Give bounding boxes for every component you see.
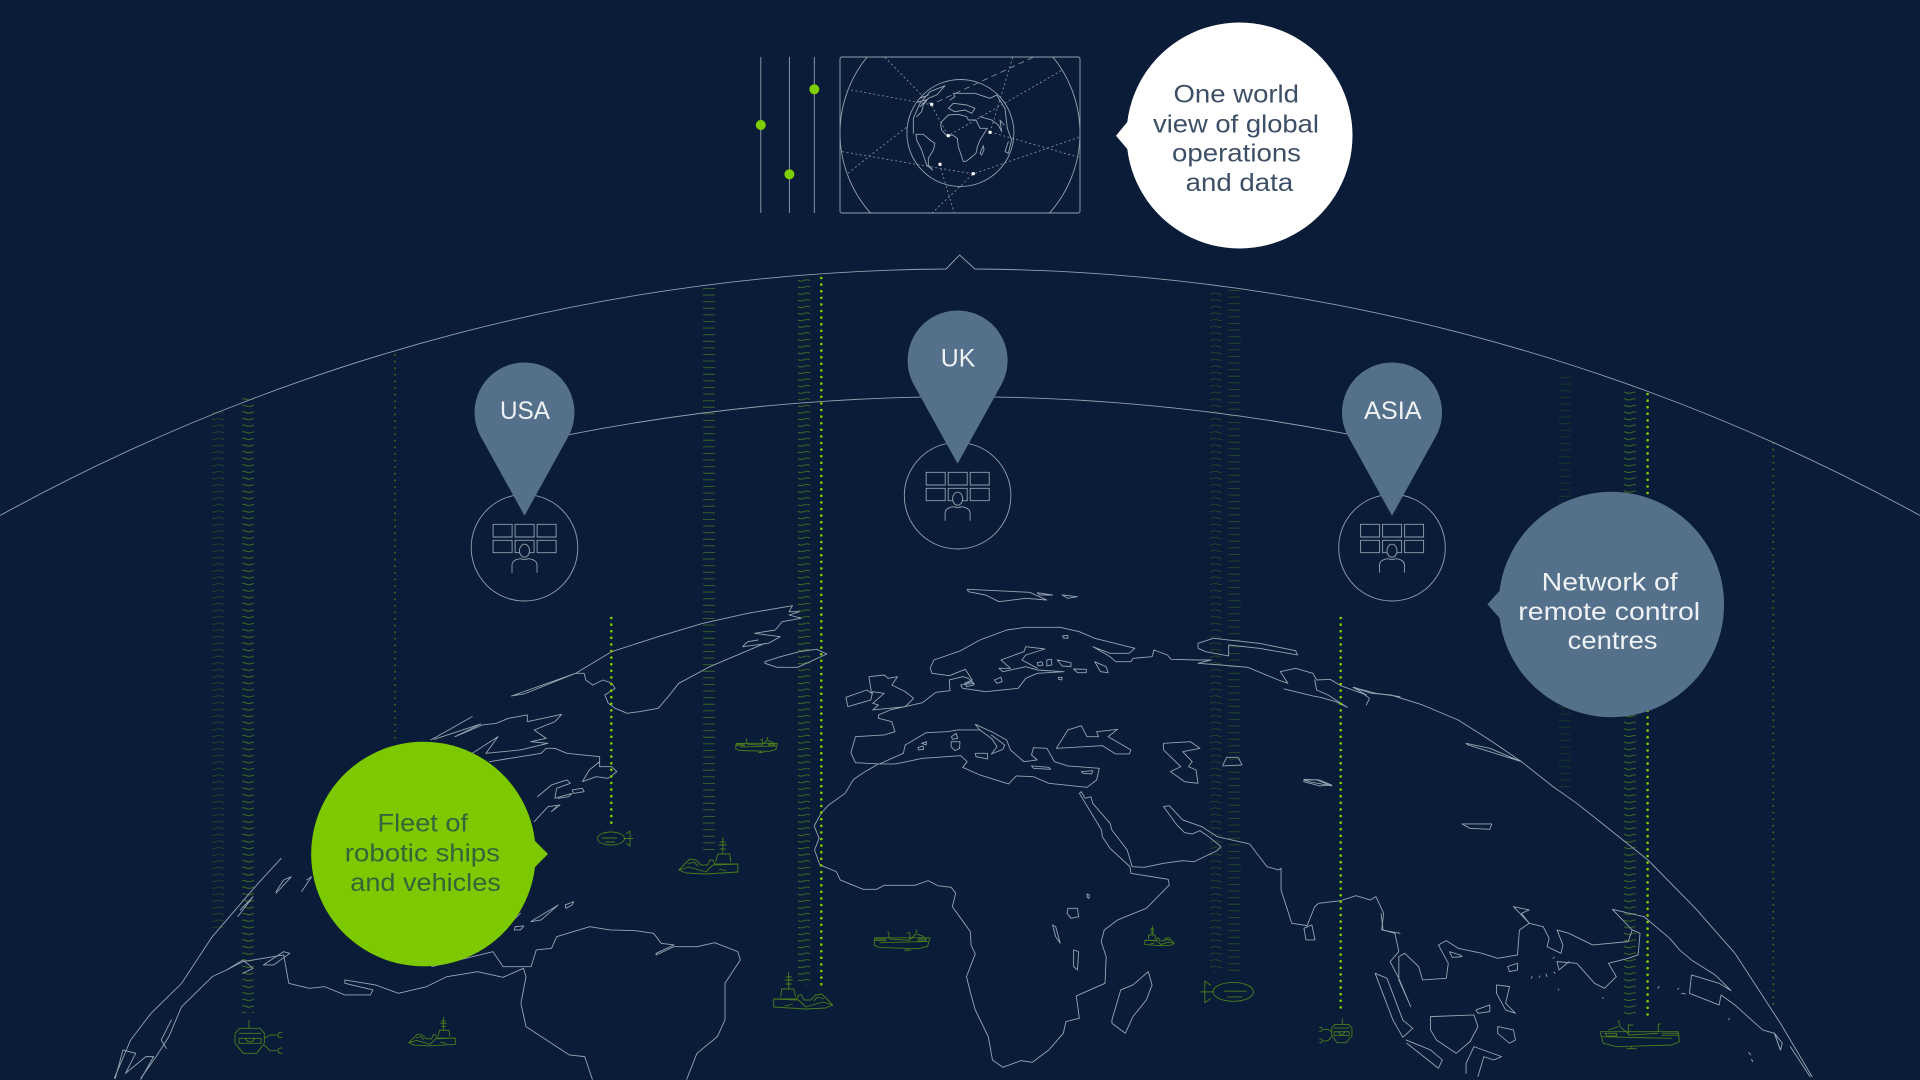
Svalbard [967,589,1077,602]
callout text: robotic ships [345,840,500,868]
Caribbean [514,902,574,930]
dashed column 1565 [1559,377,1571,790]
Java [1406,1040,1442,1068]
callout text: One world [1174,81,1299,109]
Siberian peninsula [1284,680,1347,707]
tanker mid [736,737,778,752]
wavy signal column 1 [212,410,224,928]
mini globe [907,80,1014,186]
dim dotted line left [394,355,396,741]
Baltic islands [965,635,1108,687]
callout: one world view [1116,23,1352,248]
slate bubble [1487,492,1724,717]
Bay islands [227,952,290,973]
Sumatra [1375,973,1413,1037]
pin label USA: USA [500,397,550,425]
Caspian [1164,742,1200,783]
dotted link 611 [610,618,613,825]
connection lines [842,57,1079,213]
wavy signal column 1216 [1210,290,1222,973]
dim dotted line right [1772,443,1774,1007]
Iceland [765,649,827,667]
slider dot 2 [784,169,794,179]
wavy signal column 804 [798,279,810,986]
operator icon [926,472,989,521]
bright dotted links [611,278,1648,1015]
Earth limb west [114,858,312,1078]
callout: fleet of robotic ships and vehicles [311,742,548,966]
Mediterranean south coast [851,647,1099,787]
South Asia coast [1381,907,1780,1050]
map: Americas and Greenland [431,606,827,930]
tug ship mid [679,837,738,874]
Greenland [511,606,801,713]
Pacific arc [1774,1033,1810,1077]
South America north and east [432,927,740,1079]
green bubble [311,742,548,966]
Kamchatka [1466,743,1521,762]
callout text [345,810,501,897]
callout text: Network of [1542,568,1678,596]
Sulawesi [1466,1047,1502,1077]
inner network arc [569,397,1351,435]
Indian Ocean islands [1053,894,1089,970]
operator icon [1361,524,1424,573]
Coast [534,805,560,822]
data sliders [756,57,819,213]
callout text [1518,568,1700,655]
submarine Indian Ocean [1200,981,1254,1003]
Earth limb east [1353,687,1812,1077]
tug Indian Ocean [1145,926,1174,946]
Korea and Japan [1557,930,1640,988]
pin ASIA [1342,362,1442,516]
Scandinavia south [965,669,972,683]
pin USA [474,362,574,516]
ROV left [235,1020,282,1053]
big ship right [1600,1020,1679,1049]
monitor with globe [840,56,1080,214]
dashed column 1234 [1228,290,1240,973]
callout text: and data [1186,169,1293,197]
Italy [980,730,1005,754]
Aral [1223,757,1242,766]
Canada east [489,748,617,782]
wavy signal column 2 [242,398,254,1013]
Balkhash [1304,780,1332,786]
control centre USA [471,362,578,601]
tanker Atlantic [874,929,930,950]
UK and Ireland [846,675,914,710]
callout text: view of global [1153,110,1319,138]
dotted link 821 [820,278,823,985]
Gulf islands [538,780,584,798]
outer arc with apex notch [0,255,1920,516]
Novaya Zemlya [1198,638,1298,656]
tug flipped centre [774,972,833,1009]
slider tracks [761,57,814,213]
slider dot 1 [756,120,766,130]
submarine mid [598,831,633,846]
callout text: Fleet of [378,810,468,838]
operator circle [904,442,1011,549]
callout text: and vehicles [350,869,501,897]
node dots [930,103,992,175]
operator circle [471,494,578,601]
operator icon [493,524,556,573]
signal columns [212,279,1773,1015]
vehicle fleet [235,737,1679,1053]
control centre UK [904,310,1011,549]
pin UK [908,310,1008,464]
Africa and Arabia coast [814,764,1400,1067]
Sri Lanka [1304,925,1315,940]
map: Central and South America [114,858,740,1079]
Scandinavia and Russia coast [930,627,1400,697]
pin label ASIA: ASIA [1364,397,1422,425]
monitor frame [840,57,1080,213]
Black Sea [1056,726,1131,754]
Corner jagged coast [115,1020,171,1079]
dashed column 709 [703,288,715,850]
callout: network of remote control centres [1487,492,1724,717]
outer globe ring [840,58,1080,212]
map: Europe Africa Middle East [814,589,1400,1067]
operator circle [1339,494,1445,601]
Philippines [1449,952,1517,1043]
dotted link 1341 [1339,618,1342,1012]
mini globe continents [913,86,1012,170]
white bubble [1116,23,1352,248]
Canada north [431,714,562,753]
small islands [1531,957,1753,1062]
Central America and South America west [141,955,592,1079]
world map [114,589,1812,1079]
ROV flipped [1319,1018,1352,1043]
callout text: operations [1172,140,1301,168]
Mediterranean islands [918,733,1093,774]
callout text [1153,81,1319,197]
wavy signal column 1630 [1624,389,1636,1015]
Madagascar [1112,972,1152,1033]
callout text: centres [1568,627,1658,655]
pin label UK: UK [941,345,976,373]
callout text: remote control [1518,598,1700,626]
Sakhalin sliver [1304,779,1492,829]
small seas [1355,687,1369,705]
map: Asia and limb [1304,687,1812,1077]
dotted link 1648 [1646,394,1649,1015]
slider dot 3 [809,84,819,94]
Borneo [1430,1015,1478,1053]
tug ship bottom left [409,1017,455,1046]
control centre ASIA [1339,362,1445,601]
